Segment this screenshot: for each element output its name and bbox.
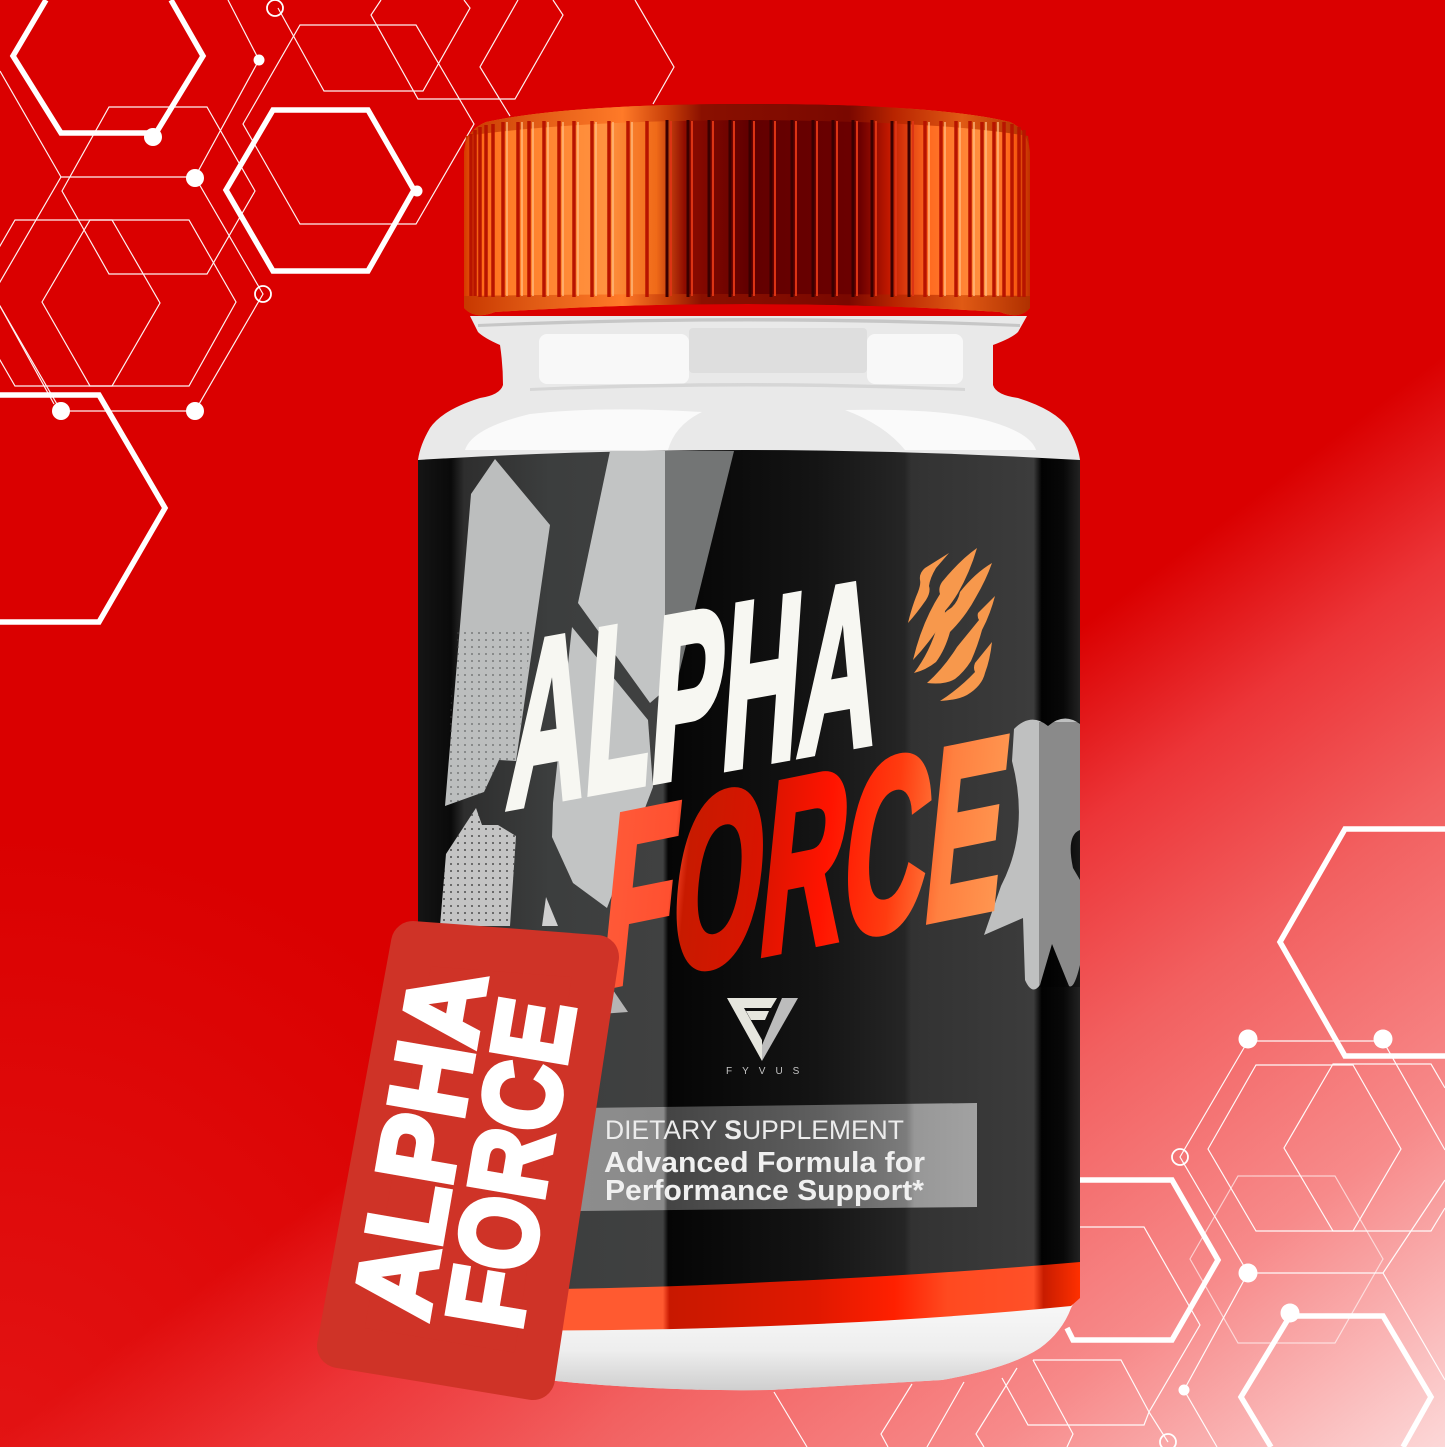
card text: ALPHA: ALPHA xyxy=(330,960,509,1326)
neck highlights xyxy=(478,318,1020,391)
claw icon xyxy=(908,548,995,701)
bottle bottom gloss xyxy=(418,1290,1080,1390)
hexagon network: bottom right xyxy=(774,829,1445,1447)
thick hexagon outlines: top left xyxy=(0,0,414,622)
label red stripe xyxy=(418,1262,1080,1330)
promo card xyxy=(330,943,598,1378)
node dots: top left xyxy=(52,54,422,420)
cap bottom rim xyxy=(464,294,1030,315)
product name: FORCE: FORCE xyxy=(592,683,1019,1039)
cap ribs: grooves on orange xyxy=(471,121,1024,297)
product name: ALPHA: ALPHA xyxy=(502,529,888,859)
label info box xyxy=(580,1103,977,1211)
cap ribs: bright lines in shaded centre xyxy=(671,121,913,296)
orange sliver behind box xyxy=(577,1132,592,1208)
bottle body: white plastic xyxy=(418,316,1080,1390)
hexagon network: top left xyxy=(0,0,674,622)
card background xyxy=(339,943,597,1378)
bottle xyxy=(418,104,1080,1390)
cap ribs: grooves in shaded centre xyxy=(667,120,909,297)
grey graphic: left tower xyxy=(440,459,628,1014)
bottle cap xyxy=(464,104,1030,315)
cap top rim xyxy=(464,104,1030,152)
product label: black wrap xyxy=(418,450,1080,1308)
label info box: DIETARY SUPPLEMENT xyxy=(605,1115,904,1145)
shoulder highlights xyxy=(465,409,1036,450)
thick hexagon outlines: bottom right xyxy=(1067,829,1445,1447)
brand logo: FYVUS xyxy=(726,998,809,1077)
rings: top left xyxy=(255,0,283,302)
cap ribs: bright edges on orange xyxy=(507,122,998,296)
label info box: Advanced Formula for xyxy=(604,1147,925,1179)
rings: bottom right xyxy=(1160,1149,1188,1447)
grey graphic: right claw mark xyxy=(984,718,1080,989)
brand logo: FYVUS: FYVUS xyxy=(726,1066,809,1077)
label info box: Performance Support* xyxy=(605,1175,925,1207)
node dots: bottom right xyxy=(1178,1030,1392,1396)
grey graphic: diagonal beam xyxy=(552,451,734,908)
card text: FORCE: FORCE xyxy=(423,990,598,1336)
